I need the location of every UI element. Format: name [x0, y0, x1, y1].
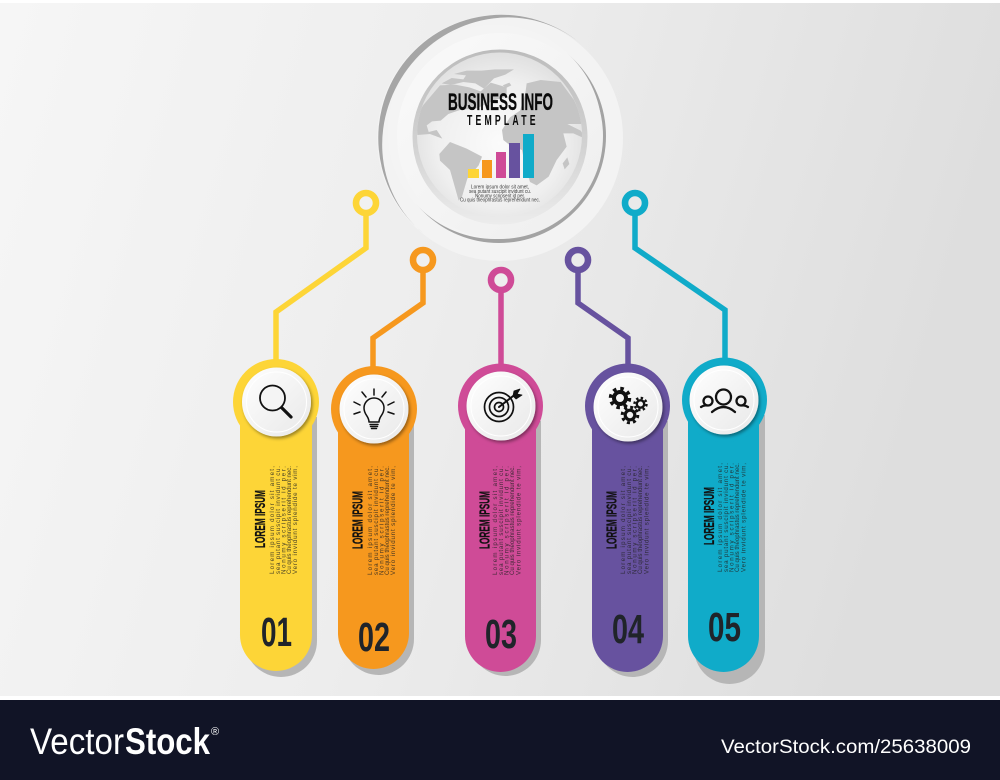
body text — [620, 466, 650, 574]
shadow — [343, 424, 414, 675]
badge description: Cu quis theophrastus reprehendunt nec. — [460, 198, 540, 204]
heading: LOREM IPSUM — [350, 491, 366, 549]
icon: light bulb — [354, 389, 394, 428]
panel: step 04 — [585, 364, 670, 677]
inner white plate — [397, 33, 603, 239]
world map — [416, 69, 587, 201]
number: 05 — [708, 604, 741, 650]
footer bar — [0, 700, 1000, 780]
body text — [717, 463, 748, 572]
inner ring — [412, 50, 588, 224]
icon disc — [466, 372, 536, 440]
shadow — [245, 417, 317, 677]
body text: sea putant suscipit invidunt cu. — [275, 466, 282, 574]
subtitle: TEMPLATE — [467, 112, 539, 129]
connector: yellow — [276, 193, 376, 362]
number: 03 — [485, 611, 517, 657]
body text: Nonumy scripserit id per. — [280, 466, 288, 574]
number: 04 — [612, 606, 644, 652]
footer bar: Stock — [125, 721, 210, 762]
panel: step 02 — [331, 366, 417, 675]
outer light plate — [377, 15, 623, 261]
footer bar: ® — [211, 726, 219, 738]
body text: Cu quis theophrastus reprehendunt nec. — [509, 466, 516, 575]
lower-right grey crescent — [392, 29, 606, 243]
connector: purple — [568, 250, 628, 365]
icon: people — [701, 390, 748, 412]
body text: Nonumy scripserit id per. — [728, 463, 736, 572]
body — [338, 409, 409, 669]
body text: sea putant suscipit invidunt cu. — [723, 463, 730, 572]
body text: Cu quis theophrastus reprehendunt nec. — [637, 466, 644, 574]
central globe badge — [377, 15, 623, 261]
body text — [367, 466, 397, 575]
badge description: sea putant suscipit invidunt cu. — [469, 189, 531, 195]
body — [592, 406, 663, 672]
body text: Vero invidunt splendide te vim, — [644, 466, 650, 574]
icon: gears — [610, 388, 646, 423]
heading: LOREM IPSUM — [701, 487, 718, 545]
connector: teal — [625, 193, 725, 359]
body text: Lorem ipsum dolor sit amet, — [620, 466, 627, 574]
body text: Nonumy scripserit id per. — [632, 466, 638, 574]
icon disc — [242, 368, 311, 436]
icon: magnifier — [260, 386, 291, 417]
body text — [269, 466, 299, 574]
heading: LOREM IPSUM — [476, 491, 494, 549]
connector: pink — [491, 270, 511, 365]
globe disc — [417, 52, 582, 218]
body text: Vero invidunt splendide te vim, — [740, 463, 748, 572]
shadow — [470, 421, 541, 676]
body text: Lorem ipsum dolor sit amet, — [717, 463, 724, 572]
shadow — [597, 421, 668, 677]
body text: Lorem ipsum dolor sit amet, — [269, 466, 276, 574]
icon disc — [340, 374, 408, 444]
body text: Vero invidunt splendide te vim, — [292, 466, 299, 574]
icon: target — [484, 389, 522, 422]
mini bar chart — [468, 134, 534, 178]
body text: Cu quis theophrastus reprehendunt nec. — [734, 463, 741, 572]
body text: Vero invidunt splendide te vim, — [390, 466, 397, 575]
body text: sea putant suscipit invidunt cu. — [498, 466, 505, 575]
body text: Lorem ipsum dolor sit amet, — [492, 466, 499, 575]
body text: Nonumy scripserit id per. — [504, 466, 510, 575]
badge description — [460, 184, 540, 204]
panel: step 03 — [458, 364, 543, 676]
body text: Cu quis theophrastus reprehendunt nec. — [286, 466, 293, 574]
heading: LOREM IPSUM — [252, 490, 269, 548]
badge description: Nonumy scripserit id per. — [475, 194, 525, 200]
icon disc — [594, 372, 662, 442]
body — [465, 406, 536, 672]
number: 01 — [261, 609, 292, 655]
body text — [492, 466, 522, 575]
footer image id: VectorStock.com/25638009 — [721, 736, 971, 758]
body text: sea putant suscipit invidunt cu. — [373, 466, 380, 575]
body text: Lorem ipsum dolor sit amet, — [367, 466, 374, 575]
upper-left grey crescent — [378, 15, 580, 233]
body — [240, 402, 312, 671]
icon disc — [690, 366, 758, 434]
title: BUSINESS INFO — [448, 89, 553, 116]
body text: Nonumy scripserit id per. — [378, 466, 386, 575]
body text: Cu quis theophrastus reprehendunt nec. — [384, 466, 391, 575]
number: 02 — [358, 614, 390, 660]
footer logo: Vector — [30, 721, 124, 762]
shadow — [694, 415, 765, 684]
panel: step 05 — [682, 358, 767, 684]
panel: step 01 — [233, 359, 319, 677]
body text: Vero invidunt splendide te vim, — [516, 466, 522, 575]
badge description: Lorem ipsum dolor sit amet, — [471, 184, 529, 190]
body — [688, 400, 759, 672]
heading: LOREM IPSUM — [604, 491, 620, 549]
body text: sea putant suscipit invidunt cu. — [626, 466, 633, 574]
connector: orange — [373, 250, 433, 368]
